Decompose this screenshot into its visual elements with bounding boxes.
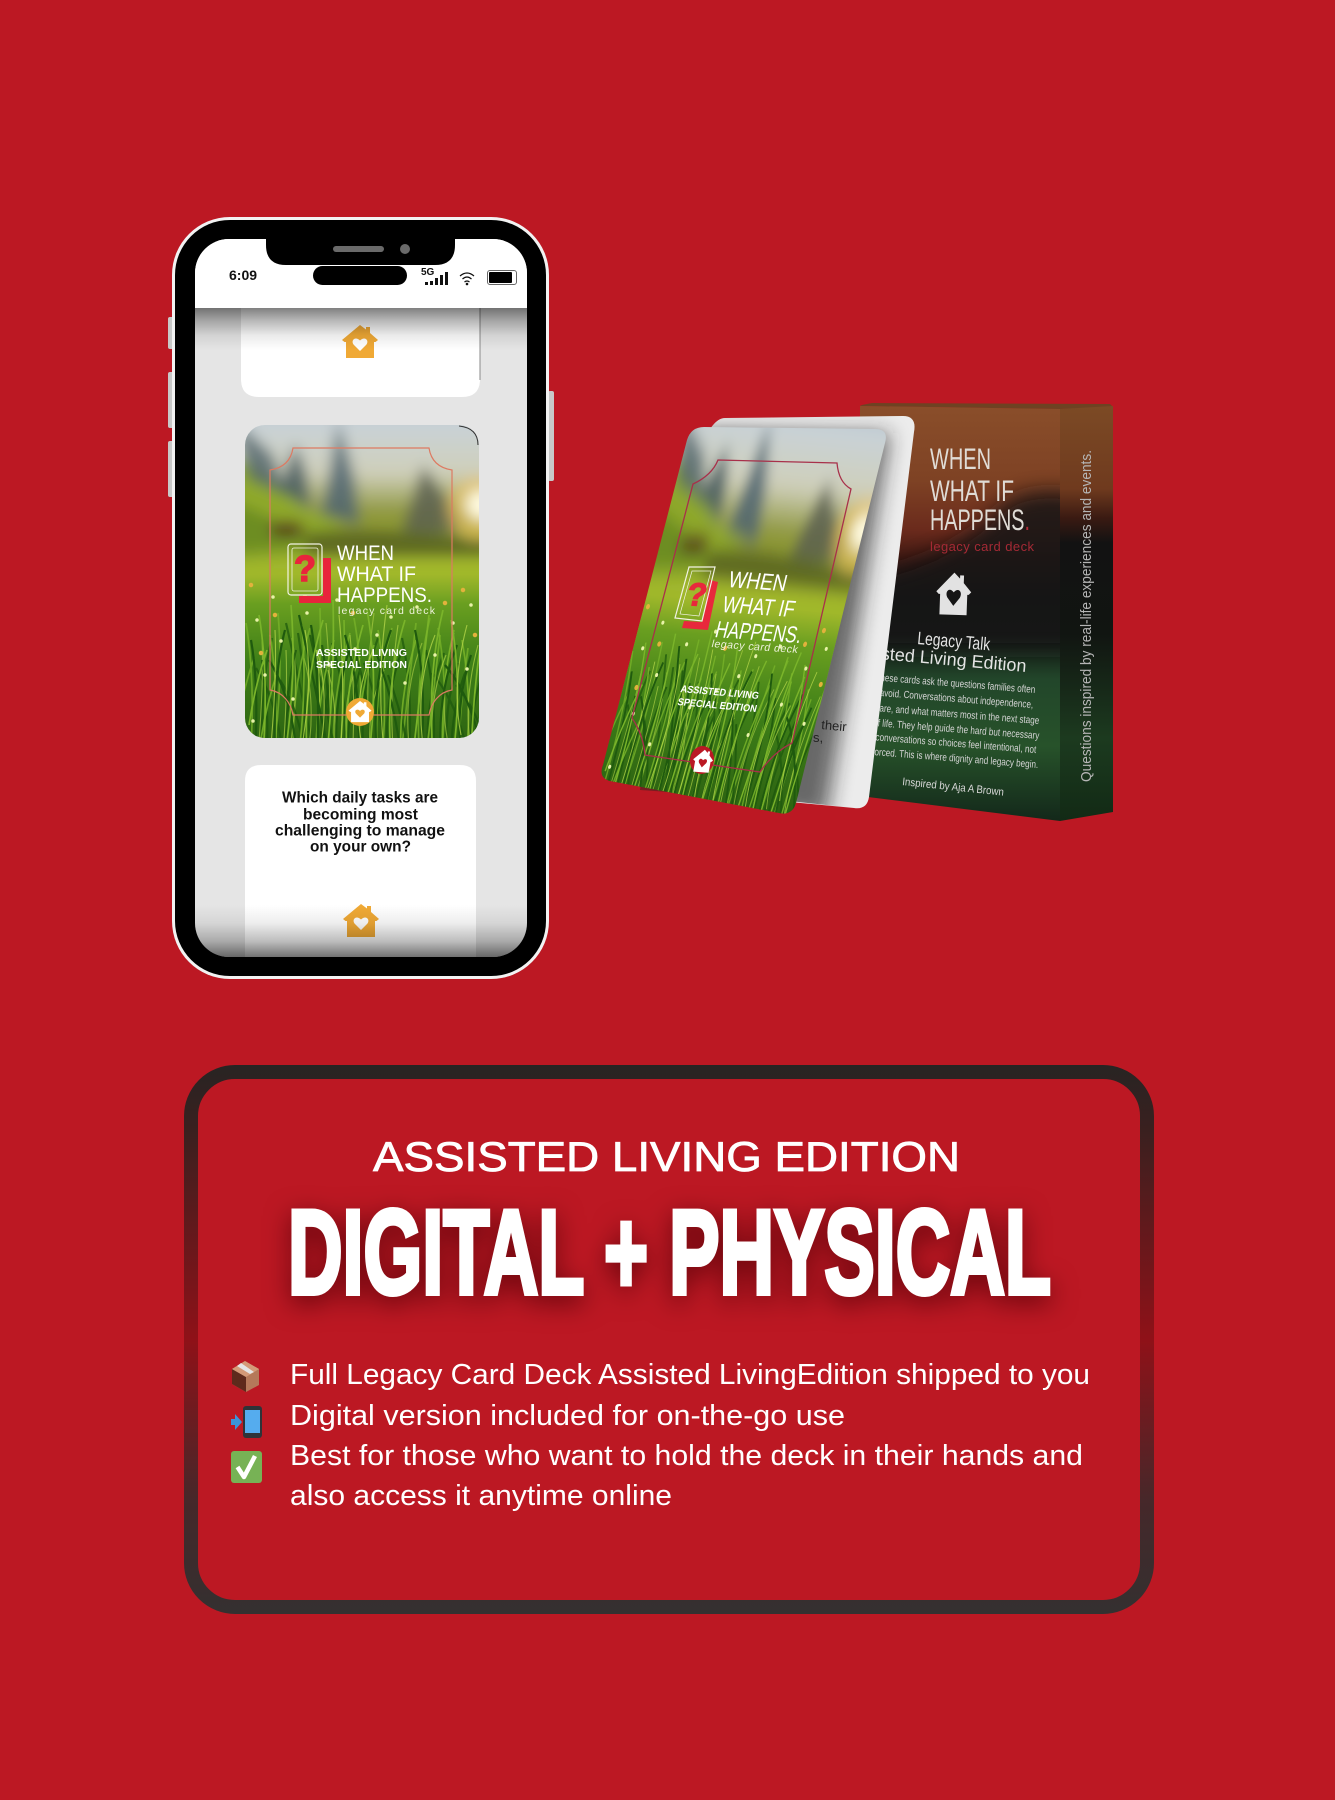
benefit text 3: Best for those who want to hold the deck in their hands and — [290, 1440, 1083, 1472]
white back card — [620, 416, 915, 820]
box spine text: Questions inspired by real-life experiences and events. — [1079, 450, 1095, 782]
edition label — [316, 649, 406, 668]
card deck and box mockup — [602, 403, 1113, 821]
screen shading — [195, 308, 527, 957]
status time: 6:09 — [229, 267, 257, 283]
box top flap — [860, 403, 1113, 409]
status bar — [195, 239, 527, 308]
icon: orange house — [343, 904, 379, 937]
logo wordmark — [337, 542, 436, 617]
partial card text: their — [821, 717, 848, 734]
card frame — [270, 448, 452, 715]
box subtitle: Assisted Living Edition — [846, 640, 1027, 676]
edition label: ASSISTED LIVING — [316, 647, 407, 659]
icon: house badge — [346, 698, 374, 726]
question text: Which daily tasks are — [282, 790, 438, 806]
front grass card — [602, 427, 886, 814]
box description: conversations so choices feel intentional, not — [875, 732, 1037, 755]
box description: care, and what matters most in the next stage — [875, 702, 1040, 726]
logo wordmark: legacy card deck — [338, 605, 436, 617]
box subtitle: Legacy Talk — [917, 628, 992, 654]
grass cover card — [245, 425, 479, 738]
partial answer card — [241, 300, 480, 397]
question card — [245, 765, 476, 960]
edition label — [676, 684, 760, 715]
icon: package — [232, 1361, 259, 1392]
box title — [930, 443, 1034, 554]
status icons — [421, 267, 516, 285]
box front face — [860, 406, 1060, 821]
partial card text: s, — [813, 730, 823, 745]
panel border — [191, 1072, 1147, 1607]
box credit: Inspired by Aja A Brown — [902, 776, 1004, 799]
phone body — [172, 217, 549, 979]
phone side buttons — [168, 317, 554, 497]
question text: challenging to manage — [275, 822, 445, 840]
logo: card with question mark: ? — [294, 548, 316, 589]
logo wordmark: WHAT IF — [337, 563, 416, 586]
box description: These cards ask the questions families often — [875, 672, 1036, 695]
box title: legacy card deck — [930, 539, 1034, 554]
edition subheading: ASSISTED LIVING EDITION — [373, 1133, 960, 1180]
panel: edition summary — [191, 1072, 1147, 1607]
logo wordmark: WHEN — [337, 542, 394, 565]
card frame — [632, 460, 851, 772]
edition label: ASSISTED LIVING — [679, 684, 760, 702]
icon: orange house on card — [342, 325, 378, 358]
partial card text — [813, 717, 848, 745]
logo wordmark: legacy card deck — [710, 638, 800, 656]
status icons: 5G — [421, 267, 435, 278]
edition label: SPECIAL EDITION — [316, 659, 407, 671]
logo wordmark: WHAT IF — [720, 591, 798, 622]
box title: HAPPENS. — [930, 504, 1030, 537]
box description — [872, 672, 1040, 770]
box title: WHAT IF — [930, 475, 1014, 508]
question text — [275, 790, 445, 856]
box description: forced. This is where dignity and legacy begin. — [872, 746, 1039, 770]
box description: of life. They help guide the hard but necessary — [873, 717, 1040, 741]
icon: phone with arrow — [231, 1406, 262, 1438]
box title: WHEN — [930, 443, 991, 476]
phone mockup — [168, 217, 554, 979]
logo wordmark: HAPPENS. — [713, 616, 805, 648]
box description: avoid. Conversations about independence, — [879, 687, 1034, 710]
phone screen — [185, 239, 539, 960]
question text: becoming most — [303, 806, 418, 824]
logo wordmark: WHEN — [726, 566, 790, 596]
benefit text 2: Digital version included for on-the-go use — [290, 1400, 845, 1432]
benefit list — [231, 1359, 1090, 1512]
icon: house badge — [688, 744, 716, 776]
logo wordmark — [710, 566, 805, 656]
notch — [266, 236, 455, 285]
box side face — [1060, 406, 1113, 821]
benefit text 4: also access it anytime online — [290, 1480, 672, 1512]
logo: card with question mark: ? — [684, 576, 710, 613]
icon: box house — [936, 572, 972, 615]
icon: check mark — [231, 1451, 262, 1483]
box — [860, 403, 1113, 821]
edition label: SPECIAL EDITION — [676, 697, 758, 715]
benefit text 1: Full Legacy Card Deck Assisted LivingEdition shipped to you — [290, 1359, 1090, 1391]
question text: on your own? — [310, 838, 411, 856]
logo wordmark: HAPPENS. — [337, 584, 432, 607]
logo: card with question mark — [675, 567, 718, 630]
logo: card with question mark — [288, 544, 331, 603]
